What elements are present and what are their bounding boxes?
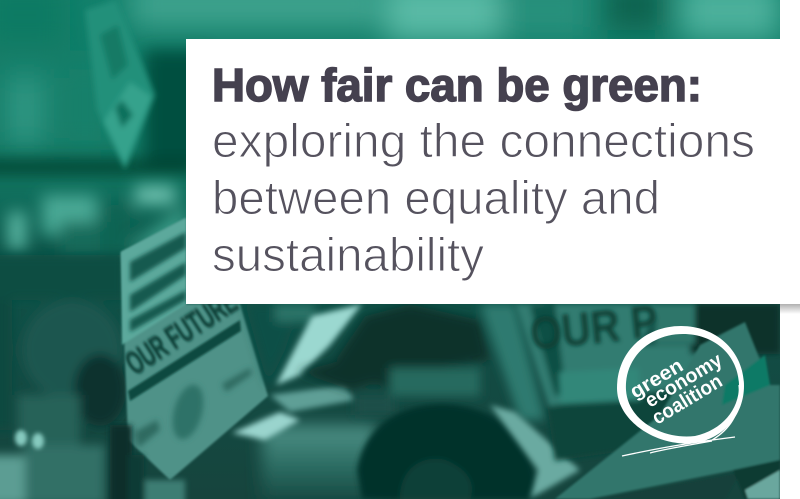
placard: our future <box>119 218 268 480</box>
subtitle line 2: between equality and <box>212 171 660 224</box>
lower left: hair and face <box>0 255 126 499</box>
logo wordmark <box>626 349 727 429</box>
shadow under title panel, right margin <box>780 304 800 314</box>
cap wearer: dark head in centre <box>298 304 545 420</box>
logo wordmark: coalition <box>648 370 726 429</box>
dark wedge right of placard <box>245 304 315 385</box>
title bold line: How fair can be green: <box>212 59 702 111</box>
dark beads bottom of placard <box>110 425 185 499</box>
logo brush ring <box>617 326 744 443</box>
placard slogan second: OUR P <box>528 295 660 360</box>
second placard: our p <box>515 304 780 461</box>
title panel <box>186 39 800 304</box>
subtitle line 3: sustainability <box>212 228 484 281</box>
logo: green economy coalition <box>617 326 744 456</box>
foreground dark head <box>357 404 538 499</box>
dark band left of the title panel <box>0 50 205 174</box>
glasses highlights <box>15 430 44 449</box>
placard slogan: OUR FUTURE <box>119 283 244 383</box>
logo wordmark: economy <box>641 349 727 412</box>
logo wordmark: green <box>626 355 687 403</box>
central hand and light patch <box>232 304 362 440</box>
top band of blurred light shapes <box>0 0 780 150</box>
right side light patch beside head <box>490 405 580 499</box>
graduation cap <box>555 322 780 499</box>
lower centre: sleeve gradient <box>262 425 377 499</box>
blurred placard held at top left <box>85 0 155 170</box>
light shapes above the left placard <box>8 186 186 257</box>
subtitle line 1: exploring the connections <box>212 114 755 167</box>
